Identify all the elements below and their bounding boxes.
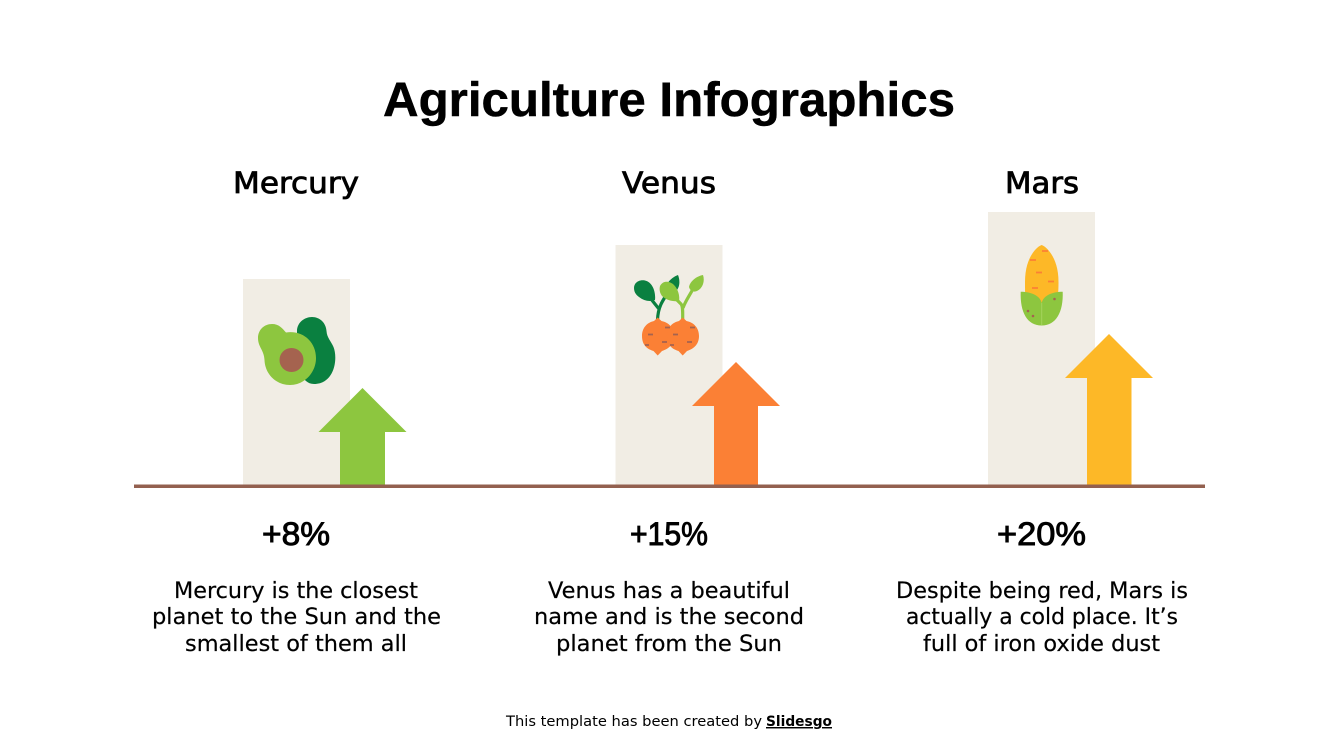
icon: avocado [258,317,335,385]
arrow: green up [318,388,406,485]
footer credit: This template has been created by [505,714,762,730]
value: +20%: +20% [997,516,1086,552]
description: Mars: full of iron oxide dust [923,631,1160,657]
panel: Mercury [152,166,441,657]
description: Venus: Venus has a beautiful [548,578,790,604]
description: Mercury [152,578,441,657]
heading: Mars: Mars [1005,166,1079,200]
description: Venus: planet from the Sun [556,631,782,657]
bar: Venus [616,245,722,485]
description: Mars: actually a cold place. It’s [906,604,1178,630]
baseline axis [134,484,1205,488]
description: Venus: name and is the second [534,604,804,630]
bar: Mars [988,212,1095,485]
icon: turnips [634,275,704,356]
footer credit: Slidesgo [766,714,832,730]
description: Venus [534,578,804,657]
description: Mars: Despite being red, Mars is [896,578,1188,604]
heading: Venus: Venus [622,166,716,200]
description: Mercury: smallest of them all [185,631,407,657]
arrow: orange up [692,362,780,485]
value: +8%: +8% [262,516,330,552]
description: Mercury: Mercury is the closest [174,578,418,604]
panel: Mars [896,166,1188,657]
bar: Mercury [243,279,350,485]
value: +15%: +15% [630,516,708,552]
title: Agriculture Infographics [383,74,955,127]
description: Mercury: planet to the Sun and the [152,604,441,630]
icon: corn [1021,245,1063,326]
heading: Mercury: Mercury [233,166,359,200]
description: Mars [896,578,1188,657]
arrow: yellow up [1065,334,1153,485]
panel: Venus [534,166,804,657]
